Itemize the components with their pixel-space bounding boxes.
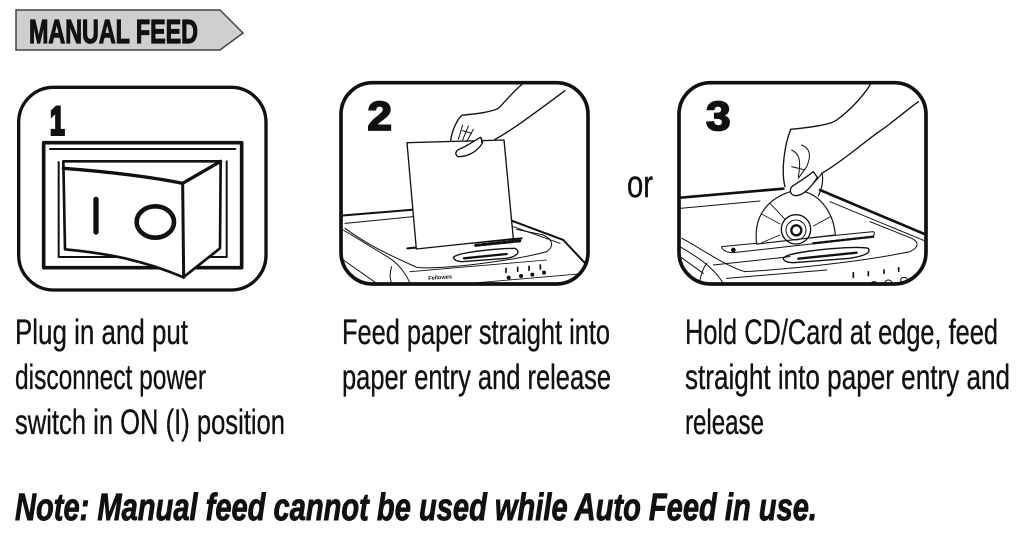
text block: step 2 caption: Feed paper straight into [342, 313, 610, 352]
illustration: hand holding disc [783, 85, 918, 196]
illustration: sheet of paper [407, 140, 513, 249]
panel: step 3 feed CD [679, 83, 927, 287]
text block: step 1 caption: disconnect power [15, 358, 206, 397]
text block: step 1 caption: switch in ON (I) position [15, 403, 285, 442]
label: or: or [627, 164, 653, 206]
panel: step 2 feed paper [341, 83, 588, 287]
step number 2: 2 [367, 93, 392, 139]
text block: step 1 caption [15, 313, 285, 442]
illustration: shredder top [341, 209, 588, 287]
illustration: hand holding paper [451, 85, 565, 157]
step number 1: 1 [50, 100, 65, 144]
text block: step 3 caption [685, 313, 1010, 442]
step number 3: 3 [706, 93, 731, 139]
text block: step 3 caption: release [685, 403, 764, 442]
text block: step 2 caption [342, 313, 611, 397]
text block: step 2 caption: paper entry and release [342, 358, 611, 397]
illustration: shredder control buttons [476, 241, 522, 245]
illustration: shredder top [680, 189, 927, 287]
heading: manual feed tag: MANUAL FEED [29, 13, 198, 50]
icon: rocker switch [44, 143, 242, 277]
illustration: compact disc [756, 191, 835, 244]
panel: step 1 power switch [19, 87, 266, 290]
illustration: shredder top: Fellowes [428, 274, 452, 282]
text block: step 1 caption: Plug in and put [15, 313, 188, 352]
